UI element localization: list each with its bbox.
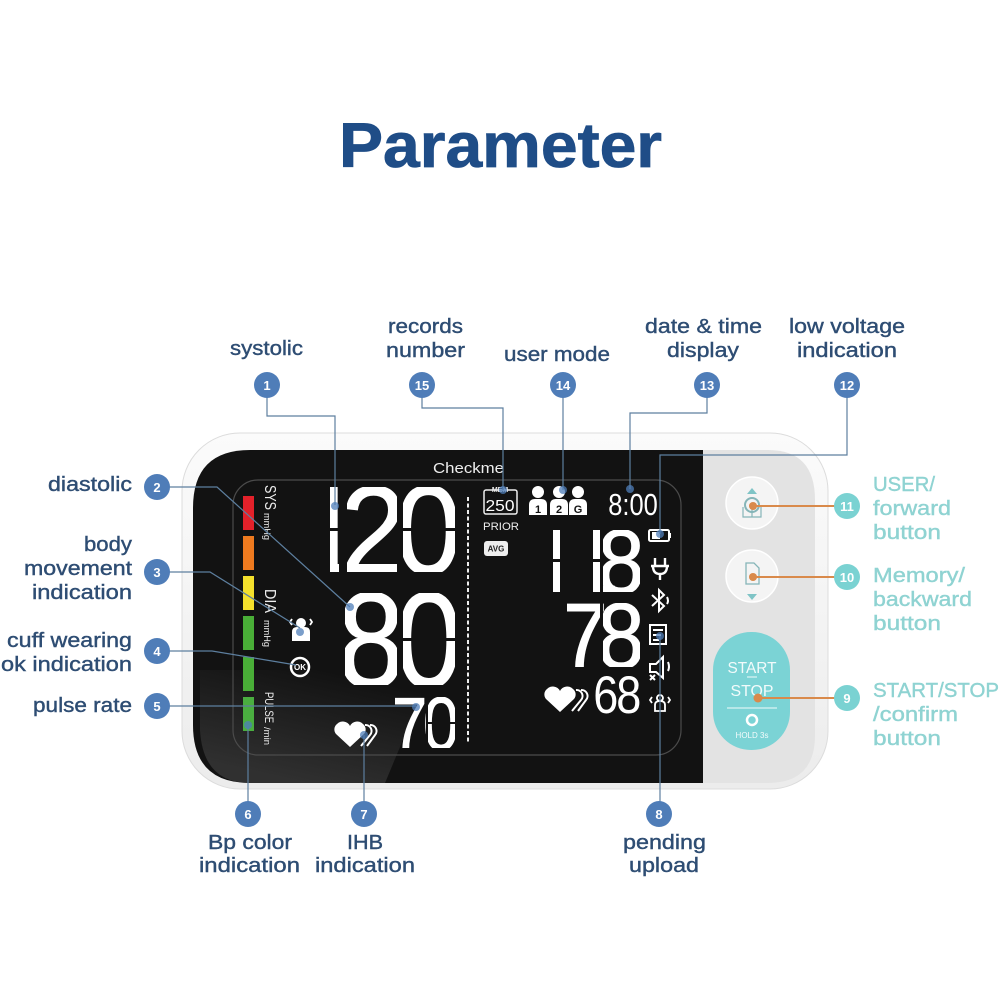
AVG badge: AVG [488, 544, 504, 554]
reading: diastolic 80 [345, 593, 455, 685]
number badges: 4 [153, 644, 161, 659]
number badges: 11 [840, 499, 854, 514]
icon: IHB hearts [334, 722, 377, 747]
axis labels: /min [262, 727, 272, 745]
icon: pending upload [650, 625, 666, 644]
label: Memory backward button: backward [873, 589, 972, 611]
button: start stop [713, 632, 790, 750]
icon: battery [649, 530, 671, 541]
label: cuff wearing ok indication: cuff wearing [7, 630, 132, 652]
number badges: 8 [655, 807, 663, 822]
label: systolic: systolic [230, 338, 303, 360]
reading: systolic 120: 120 [296, 461, 462, 602]
previous pulse 68: 68 [593, 666, 641, 725]
label: user mode: user mode [504, 344, 610, 366]
reading: systolic 120 [330, 487, 455, 572]
callout lines: dark blue [169, 397, 847, 802]
button: start stop: START [728, 660, 777, 677]
button: user forward [726, 477, 778, 529]
label: body movement indication: movement [24, 558, 133, 580]
button: memory backward [726, 550, 778, 602]
reading: diastolic 80: 80 [337, 564, 462, 717]
label: pending upload [623, 832, 706, 877]
button: start stop: HOLD 3s [736, 731, 768, 740]
label: date and time display: date & time [645, 316, 762, 338]
previous reading 78: 78 [561, 584, 645, 688]
brand name: Checkme [433, 460, 504, 477]
number badges: 6 [244, 807, 252, 822]
blood pressure monitor device [182, 433, 828, 789]
label: pending upload: pending [623, 832, 706, 854]
label: Memory backward button: Memory/ [873, 565, 966, 587]
label: low voltage indication: low voltage [789, 316, 905, 338]
icon: mute speaker [650, 657, 669, 680]
label: pending upload: upload [629, 855, 699, 877]
user mode icons [529, 486, 587, 516]
label: USER forward button: button [873, 522, 941, 544]
label: low voltage indication: indication [797, 340, 897, 362]
label: body movement indication: indication [32, 582, 132, 604]
number badges: 13 [700, 378, 714, 393]
time display: 8:00 [608, 487, 658, 522]
label: START STOP confirm button: button [873, 728, 941, 750]
label: START STOP confirm button: START/STOP [873, 680, 999, 702]
reading: pulse 70 [395, 697, 455, 748]
label: body movement indication: body [84, 534, 132, 556]
PRIOR label: PRIOR [483, 521, 519, 533]
label: Memory backward button: button [873, 613, 941, 635]
button: start stop: STOP [730, 683, 774, 700]
BP color bar [243, 496, 254, 731]
label: low voltage indication [789, 316, 905, 362]
label: body movement indication [24, 534, 133, 604]
number badges: 9 [843, 691, 851, 706]
icon: cuff ok [291, 658, 309, 676]
number badges: 3 [153, 565, 161, 580]
label: Bp color indication [199, 832, 300, 877]
icon: plug [651, 558, 669, 580]
axis labels: mmHg [262, 513, 272, 540]
number badges: 15 [415, 378, 429, 393]
right control panel [690, 450, 815, 783]
previous reading 118 [553, 530, 640, 592]
label: START STOP confirm button [873, 680, 999, 750]
axis labels: DIA [261, 589, 278, 613]
number badges [144, 372, 860, 827]
user mode icons: 1 [535, 504, 541, 516]
label: Bp color indication: Bp color [208, 832, 292, 854]
axis labels: mmHg [262, 620, 272, 647]
icon: body movement [290, 618, 312, 641]
icon: movement [650, 695, 670, 711]
memory counter: 250 [486, 498, 515, 515]
dashed divider [467, 497, 469, 742]
number badges: 5 [153, 699, 161, 714]
label: USER forward button: USER/ [873, 474, 935, 496]
icon: bluetooth [652, 590, 668, 611]
screen glare [200, 670, 432, 783]
label: diastolic: diastolic [48, 474, 132, 496]
label: IHB indication: indication [315, 855, 415, 877]
label: date and time display [645, 316, 762, 362]
number badges: 14 [556, 378, 571, 393]
user mode icons: G [574, 504, 582, 516]
label: pulse rate: pulse rate [33, 695, 132, 717]
LCD outline [233, 480, 681, 755]
black screen [193, 450, 703, 783]
reading: pulse 70: 70 [391, 682, 459, 766]
previous reading 118: 118 [531, 510, 645, 613]
axis labels: SYS [261, 485, 278, 510]
label: START STOP confirm button: /confirm [873, 704, 958, 726]
icon: small IHB hearts [544, 687, 588, 712]
label: records number [386, 316, 465, 362]
device body [182, 433, 828, 789]
memory counter: MEM [492, 487, 508, 494]
label: USER forward button [873, 474, 951, 544]
label: date and time display: display [667, 340, 739, 362]
callout lines: orange [749, 502, 835, 702]
label: records number: records [388, 316, 463, 338]
number badges: 10 [840, 570, 854, 585]
label: Bp color indication: indication [199, 855, 300, 877]
label: Memory backward button [873, 565, 972, 635]
number badges: 2 [153, 480, 161, 495]
icon: cuff ok: OK [294, 663, 306, 672]
label: IHB indication: IHB [347, 832, 383, 854]
label: cuff wearing ok indication [1, 630, 132, 676]
number badges: 1 [263, 378, 271, 393]
axis labels: PULSE [262, 692, 276, 723]
status icon column [649, 530, 671, 711]
memory counter [484, 487, 517, 515]
AVG badge [484, 541, 508, 556]
label: records number: number [386, 340, 465, 362]
number badges: 12 [840, 378, 854, 393]
number badges: 7 [360, 807, 368, 822]
axis labels [261, 485, 278, 745]
label: cuff wearing ok indication: ok indication [1, 654, 132, 676]
title: Parameter [339, 111, 662, 181]
label: USER forward button: forward [873, 498, 951, 520]
user mode icons: 2 [556, 504, 562, 516]
label: IHB indication [315, 832, 415, 877]
